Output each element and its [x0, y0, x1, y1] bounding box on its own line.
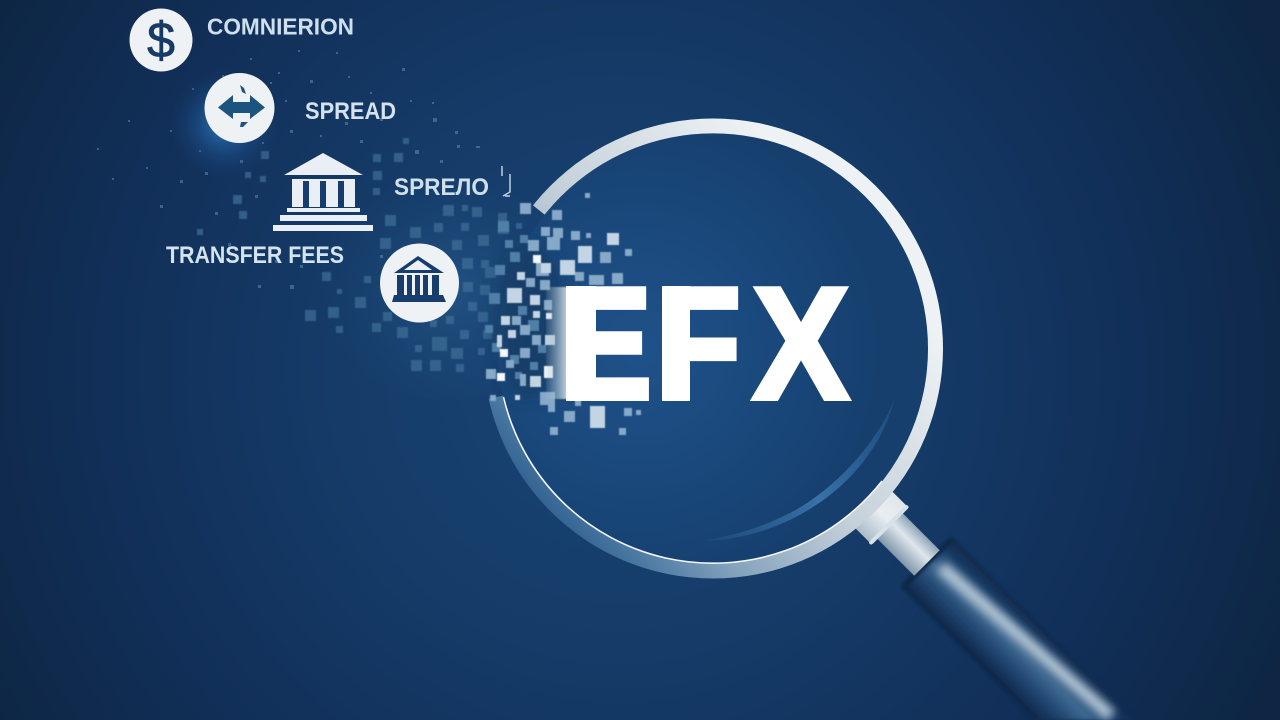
handle neck and collar	[850, 486, 946, 582]
icon: dollar: $	[147, 12, 175, 68]
letter E stem	[566, 286, 596, 401]
magnifying glass	[483, 118, 1135, 720]
icon: spread arrows	[204, 73, 274, 143]
title: EFX: X	[754, 255, 848, 432]
lens	[498, 134, 928, 564]
dissolving particles: dense cluster backing	[496, 242, 564, 398]
title: EFX: E	[560, 256, 652, 432]
label: spread 2: SPREЛO	[394, 174, 489, 201]
particle glow	[320, 180, 580, 400]
icon: dollar	[130, 8, 192, 72]
handle grip	[902, 538, 1135, 720]
glitch mark	[502, 166, 510, 196]
icon: large bank	[273, 153, 373, 231]
dissolving particles: bright squares	[485, 193, 641, 435]
title: EFX	[560, 255, 848, 432]
handle highlight	[941, 567, 1111, 716]
dissolve smear beside the E	[546, 287, 567, 399]
label: spread: SPREAD	[305, 98, 396, 125]
ring inner highlight	[504, 397, 882, 563]
dissolving particles: dim squares	[197, 138, 522, 372]
handle dark end	[903, 539, 952, 587]
letter F stem	[662, 286, 690, 401]
icon: bank in circle	[380, 244, 459, 322]
dissolving particles: faint dust	[97, 50, 480, 289]
label: transfer fees: TRANSFER FEES	[166, 242, 344, 269]
ring	[483, 118, 943, 579]
arrow icon glow	[169, 69, 279, 179]
lens reflection crescent	[700, 397, 895, 541]
label: commission: COMNIERION	[207, 14, 354, 40]
title: EFX: F	[655, 255, 741, 432]
